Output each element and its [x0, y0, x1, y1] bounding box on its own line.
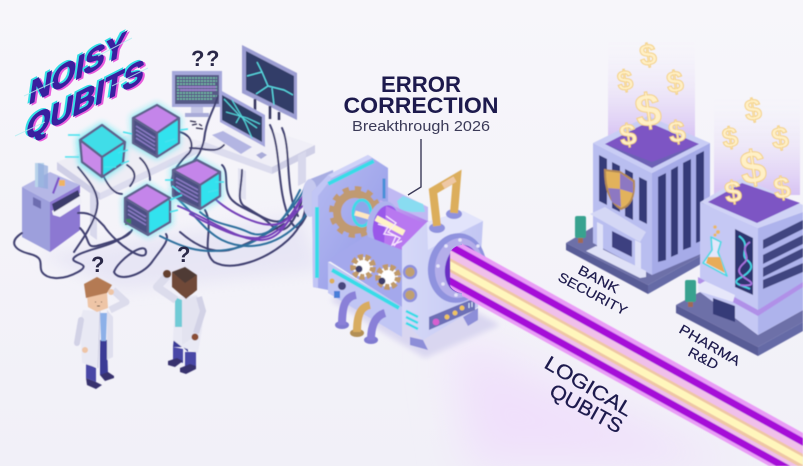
question marks over monitors: ?	[191, 46, 204, 71]
floating dollar signs: $	[720, 121, 740, 154]
question mark right scientist: ?	[177, 242, 190, 267]
pharma building	[676, 95, 803, 356]
lower magenta beam	[450, 277, 790, 466]
upper magenta beam	[450, 242, 803, 446]
rear housing	[388, 187, 428, 250]
title: noisy qubits: QUBITS	[22, 51, 145, 148]
flask icon	[703, 225, 727, 276]
monitor: cracked small	[220, 90, 265, 147]
qubit cube 1	[65, 122, 129, 181]
title: noisy qubits: QUBITS	[26, 53, 149, 150]
heading: error correction: Breakthrough 2026	[352, 118, 490, 135]
floating dollar signs: $	[772, 171, 793, 206]
floating dollar signs: $	[618, 118, 639, 153]
loose scribbles	[190, 121, 203, 129]
control panel	[429, 298, 475, 330]
bank plate	[566, 205, 715, 294]
floating dollar signs: $	[638, 38, 659, 73]
question marks over monitors	[191, 46, 219, 71]
bank tree	[575, 216, 586, 243]
large gear	[332, 189, 378, 235]
cyan strips	[317, 162, 384, 276]
qubit cube 2	[123, 102, 188, 160]
floating dollar signs: $	[667, 115, 688, 150]
pharma glow	[714, 95, 800, 195]
label: logical qubits: LOGICAL	[540, 352, 636, 421]
floating dollar signs: $	[723, 175, 744, 210]
keyboard and mouse	[212, 131, 267, 159]
left scientist head	[84, 277, 114, 312]
pharma tower	[698, 178, 803, 335]
label: pharma r&d: R&D	[686, 344, 721, 373]
bank glow	[608, 38, 695, 138]
pipes	[335, 295, 385, 344]
left scientist coat	[77, 290, 126, 368]
bank building	[566, 38, 715, 294]
bank tower	[593, 116, 710, 275]
title: noisy qubits	[15, 23, 149, 150]
pharma window bars	[763, 220, 803, 289]
error correction machine	[302, 155, 500, 358]
scientist left	[77, 277, 126, 389]
label: logical qubits: QUBITS	[546, 380, 626, 438]
beam outer glow	[450, 237, 803, 466]
floating dollar signs: $	[743, 93, 764, 128]
label: bank security: BANK	[576, 262, 621, 296]
floating dollar signs: $	[737, 139, 769, 195]
small gears	[353, 257, 398, 287]
base	[328, 236, 402, 337]
outlet block	[402, 211, 483, 350]
label: pharma r&d: PHARMA	[676, 322, 743, 369]
rear panel	[312, 155, 388, 290]
gold handle	[429, 177, 462, 233]
right scientist legs	[168, 327, 196, 374]
pharma plate	[676, 292, 803, 356]
title: noisy qubits: NOISY	[27, 24, 128, 113]
bank windows	[599, 151, 704, 262]
machine shadow	[330, 270, 500, 358]
right scientist head	[163, 267, 197, 299]
label: logical qubits	[540, 352, 636, 438]
floating dollar signs: $	[615, 64, 635, 97]
heading: error correction: CORRECTION	[344, 93, 498, 118]
scientist right	[157, 267, 204, 374]
floating dollar signs: $	[665, 65, 686, 100]
logical qubit beams	[450, 237, 803, 466]
floating dollar signs: $	[632, 82, 664, 138]
pharma entrance	[698, 281, 735, 322]
left lab: noisy qubits	[14, 45, 315, 278]
left scientist legs	[86, 340, 114, 389]
shield icon	[605, 170, 634, 209]
outlet ring	[423, 229, 491, 307]
floating dollar signs: $	[770, 121, 791, 156]
beam pale core	[450, 250, 803, 466]
label: bank security: SECURITY	[556, 269, 630, 318]
question mark left scientist: ?	[91, 252, 104, 277]
monitor: terminal	[172, 71, 222, 117]
title: noisy qubits: NOISY	[25, 23, 126, 112]
qubit cube 3	[165, 157, 224, 212]
heading: error correction: ERROR	[381, 72, 461, 97]
title: noisy qubits: NOISY	[29, 25, 130, 114]
yellow beam core	[450, 261, 803, 465]
yellow beam halo	[450, 258, 803, 466]
right scientist coat	[157, 276, 204, 353]
reactor tube	[363, 199, 430, 252]
question marks over monitors: ?	[206, 46, 219, 71]
cables	[14, 96, 310, 278]
pharma tree	[685, 280, 696, 307]
monitor: cracked large	[242, 45, 297, 120]
DNA panel	[735, 229, 753, 295]
bank portico	[586, 207, 646, 278]
title: noisy qubits: QUBITS	[24, 52, 147, 149]
cyan window	[397, 196, 425, 212]
desks	[57, 120, 315, 240]
floating dollar signs	[615, 38, 793, 210]
leader line	[408, 139, 421, 195]
heading: error correction	[344, 72, 498, 135]
qubit cube 4	[122, 182, 182, 238]
cabinet	[22, 163, 82, 252]
inlet collar	[302, 170, 340, 225]
